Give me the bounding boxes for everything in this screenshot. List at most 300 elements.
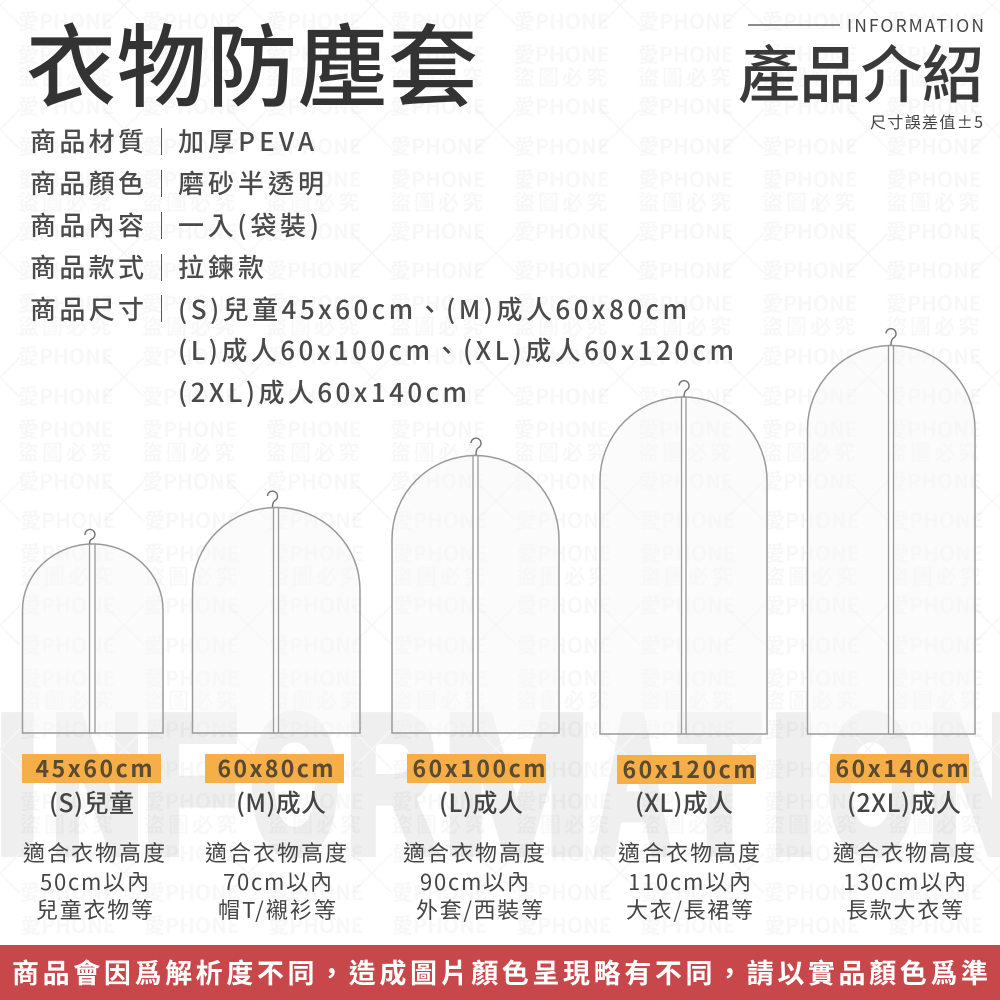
watermark text grid: 盜圖必究 [638, 187, 734, 217]
spec row: contents: 一入(袋裝) [178, 206, 319, 243]
watermark text grid: 愛PHONE [762, 216, 858, 246]
watermark text grid: 愛PHONE [516, 663, 612, 693]
watermark text grid: 愛PHONE [516, 714, 612, 744]
column: S [22, 750, 165, 925]
watermark text grid: 愛PHONE [516, 754, 612, 784]
watermark text grid: 愛PHONE [762, 131, 858, 161]
watermark text grid: 愛PHONE [268, 538, 364, 568]
watermark text grid: 愛PHONE [18, 91, 114, 121]
column: M [205, 750, 347, 925]
size name: (2XL)成人 [847, 784, 961, 820]
watermark text grid: 盜圖必究 [390, 437, 486, 467]
watermark text grid: 盜圖必究 [640, 685, 736, 715]
watermark text grid: 盜圖必究 [764, 809, 860, 839]
watermark text grid: 愛PHONE [266, 381, 362, 411]
watermark text grid: 盜圖必究 [20, 561, 116, 591]
watermark text grid: 愛PHONE [266, 39, 362, 69]
watermark text grid: 愛PHONE [392, 877, 488, 907]
watermark text grid: 愛PHONE [268, 754, 364, 784]
background lettering: INFORMATION: I [768, 675, 818, 894]
watermark text grid: 盜圖必究 [142, 311, 238, 341]
watermark text grid: 愛PHONE [142, 131, 238, 161]
watermark text grid: 愛PHONE [886, 91, 982, 121]
watermark text grid: 愛PHONE [516, 630, 612, 660]
watermark text grid: 盜圖必究 [638, 62, 734, 92]
watermark text grid: 愛PHONE [640, 754, 736, 784]
note: size tolerance: 尺寸誤差值±5 [870, 109, 983, 133]
suitability text: 110cm以內 [628, 865, 751, 897]
watermark text grid: 愛PHONE [640, 505, 736, 535]
watermark text grid: 愛PHONE [392, 630, 488, 660]
watermark text grid: 愛PHONE [142, 255, 238, 285]
spec row: material [30, 122, 315, 159]
watermark text grid: 盜圖必究 [886, 62, 982, 92]
watermark text grid: 盜圖必究 [390, 62, 486, 92]
watermark text grid: 愛PHONE [268, 838, 364, 868]
suitability text [403, 836, 545, 925]
spec row: colour: 磨砂半透明 [178, 164, 324, 201]
watermark text grid: 盜圖必究 [266, 437, 362, 467]
watermark text grid: 愛PHONE [764, 538, 860, 568]
watermark text grid: 愛PHONE [392, 910, 488, 940]
garment bag: XL [600, 381, 767, 734]
watermark text grid: 愛PHONE [638, 288, 734, 318]
watermark text grid: 愛PHONE [18, 414, 114, 444]
suitability text: 兒童衣物等 [36, 893, 153, 925]
watermark text grid: 愛PHONE [516, 538, 612, 568]
watermark text grid: 愛PHONE [514, 216, 610, 246]
watermark text grid: 愛PHONE [888, 663, 984, 693]
watermark text grid: 盜圖必究 [640, 809, 736, 839]
watermark text grid: 盜圖必究 [764, 561, 860, 591]
watermark text grid: 愛PHONE [144, 663, 240, 693]
watermark text grid: 愛PHONE [764, 786, 860, 816]
watermark text grid: 愛PHONE [638, 164, 734, 194]
size name: (S)兒童 [49, 784, 134, 820]
watermark text grid: 愛PHONE [144, 714, 240, 744]
watermark text grid: 盜圖必究 [762, 311, 858, 341]
suitability text: 適合衣物高度 [403, 836, 545, 868]
watermark text grid: 愛PHONE [514, 414, 610, 444]
watermark text grid: 盜圖必究 [764, 685, 860, 715]
watermark text grid: 愛PHONE [514, 288, 610, 318]
background lettering: INFORMATION: O [827, 675, 916, 894]
size label: 60x120cm: 60x120cm [622, 751, 756, 785]
spec row: sizes: (2XL)成人60x140cm [178, 373, 467, 410]
watermark text grid: 愛PHONE [514, 91, 610, 121]
watermark text grid: 愛PHONE [20, 505, 116, 535]
watermark text grid: 愛PHONE [20, 838, 116, 868]
watermark text grid: 愛PHONE [888, 714, 984, 744]
watermark text grid: 盜圖必究 [392, 685, 488, 715]
watermark text grid: 愛PHONE [268, 590, 364, 620]
watermark text grid: 愛PHONE [514, 466, 610, 496]
watermark text grid: 愛PHONE [886, 131, 982, 161]
watermark text grid: 愛PHONE [390, 414, 486, 444]
spec row: sizes [30, 290, 734, 410]
size label: 60x80cm: 60x80cm [218, 750, 334, 784]
watermark text grid: 盜圖必究 [18, 311, 114, 341]
size label: 60x100cm: 60x100cm [412, 750, 546, 784]
watermark text grid: 愛PHONE [638, 466, 734, 496]
watermark text grid: 盜圖必究 [516, 685, 612, 715]
watermark text grid: 愛PHONE [514, 164, 610, 194]
watermark text grid: 愛PHONE [640, 663, 736, 693]
watermark text grid: 愛PHONE [266, 341, 362, 371]
watermark text grid: 愛PHONE [142, 414, 238, 444]
watermark text grid: 愛PHONE [886, 6, 982, 36]
watermark text grid: 愛PHONE [268, 663, 364, 693]
watermark text grid: 愛PHONE [640, 630, 736, 660]
watermark text grid: 愛PHONE [514, 6, 610, 36]
spec list [30, 122, 734, 410]
suitability text: 長款大衣等 [846, 893, 963, 925]
watermark text grid: 愛PHONE [764, 630, 860, 660]
watermark text grid: 愛PHONE [390, 341, 486, 371]
watermark text grid: 盜圖必究 [886, 187, 982, 217]
watermark text grid: 愛PHONE [886, 381, 982, 411]
watermark text grid: 愛PHONE [762, 288, 858, 318]
watermark text grid: 愛PHONE [266, 466, 362, 496]
column: XL [617, 751, 760, 925]
watermark text grid: 盜圖必究 [20, 685, 116, 715]
spec row: material: 加厚PEVA [178, 122, 315, 159]
background lettering: INFORMATION: F [141, 675, 239, 894]
watermark text grid: 盜圖必究 [514, 437, 610, 467]
watermark text grid: 愛PHONE [266, 6, 362, 36]
watermark text grid: 愛PHONE [514, 341, 610, 371]
watermark text grid: 愛PHONE [886, 288, 982, 318]
spec row: sizes: (L)成人60x100cm、(XL)成人60x120cm [178, 331, 734, 368]
suitability text [618, 836, 760, 925]
garment bag: S [22, 529, 163, 733]
watermark text grid: 愛PHONE [390, 6, 486, 36]
size name: (XL)成人 [635, 784, 733, 820]
size label: 45x60cm: 45x60cm [36, 750, 152, 784]
watermark text grid: 愛PHONE [144, 630, 240, 660]
watermark text grid: 愛PHONE [142, 39, 238, 69]
watermark text grid: 愛PHONE [638, 381, 734, 411]
watermark text grid: 愛PHONE [144, 786, 240, 816]
header: information label: INFORMATION [847, 13, 984, 38]
watermark text grid: 愛PHONE [18, 381, 114, 411]
watermark text grid: 愛PHONE [392, 663, 488, 693]
watermark text grid: 愛PHONE [268, 910, 364, 940]
watermark text grid: 愛PHONE [886, 216, 982, 246]
watermark text grid: 愛PHONE [266, 91, 362, 121]
watermark text grid: 盜圖必究 [144, 809, 240, 839]
watermark text grid: 愛PHONE [764, 838, 860, 868]
watermark text grid: 愛PHONE [20, 786, 116, 816]
watermark text grid: 愛PHONE [888, 910, 984, 940]
column: 2XL [830, 750, 975, 925]
background lettering: INFORMATION: O [250, 675, 340, 894]
footer disclaimer bar [0, 945, 1000, 1000]
watermark text grid: 愛PHONE [764, 505, 860, 535]
watermark text grid: 愛PHONE [764, 590, 860, 620]
watermark text grid: 盜圖必究 [144, 561, 240, 591]
watermark text grid: 愛PHONE [144, 910, 240, 940]
watermark text grid: 愛PHONE [888, 538, 984, 568]
watermark text grid: 愛PHONE [142, 6, 238, 36]
suitability text [833, 836, 975, 925]
watermark text grid: 盜圖必究 [18, 187, 114, 217]
watermark text grid: 愛PHONE [392, 714, 488, 744]
watermark text grid: 盜圖必究 [638, 311, 734, 341]
footer disclaimer bar: 商品會因爲解析度不同，造成圖片顏色呈現略有不同，請以實品顏色爲準 [12, 952, 988, 991]
watermark text grid: 盜圖必究 [18, 62, 114, 92]
watermark text grid: 愛PHONE [142, 466, 238, 496]
watermark text grid: 盜圖必究 [514, 62, 610, 92]
watermark text grid: 愛PHONE [638, 131, 734, 161]
watermark text grid: 盜圖必究 [392, 809, 488, 839]
watermark text grid: 愛PHONE [640, 590, 736, 620]
watermark text grid: 愛PHONE [888, 877, 984, 907]
watermark text grid: 愛PHONE [142, 216, 238, 246]
suitability text: 70cm以內 [223, 865, 332, 897]
watermark text grid: 愛PHONE [886, 466, 982, 496]
spec row: style: 商品款式 [30, 248, 144, 285]
watermark text grid: 盜圖必究 [640, 561, 736, 591]
watermark text grid: 愛PHONE [638, 255, 734, 285]
watermark text grid: 愛PHONE [886, 341, 982, 371]
watermark text grid: 愛PHONE [266, 255, 362, 285]
watermark text grid: 盜圖必究 [18, 437, 114, 467]
suitability text: 大衣/長裙等 [626, 893, 753, 925]
watermark text grid: 盜圖必究 [888, 685, 984, 715]
size label: 60x140cm: 60x140cm [836, 750, 968, 784]
watermark text grid: 愛PHONE [514, 255, 610, 285]
watermark text grid: 愛PHONE [18, 341, 114, 371]
suitability text [23, 836, 165, 925]
watermark text grid: 愛PHONE [266, 414, 362, 444]
watermark text grid: 愛PHONE [20, 910, 116, 940]
watermark text grid: 愛PHONE [764, 877, 860, 907]
suitability text: 適合衣物高度 [833, 836, 975, 868]
watermark text grid: 愛PHONE [390, 288, 486, 318]
suitability text: 適合衣物高度 [618, 836, 760, 868]
watermark text grid: 愛PHONE [516, 910, 612, 940]
watermark text grid: 盜圖必究 [762, 62, 858, 92]
watermark text grid: 愛PHONE [390, 164, 486, 194]
watermark text grid: 愛PHONE [886, 39, 982, 69]
watermark text grid: 愛PHONE [266, 164, 362, 194]
watermark text grid: 愛PHONE [886, 414, 982, 444]
watermark text grid: 盜圖必究 [142, 187, 238, 217]
watermark text grid: 愛PHONE [764, 910, 860, 940]
watermark text grid: 愛PHONE [764, 714, 860, 744]
watermark text grid: 愛PHONE [392, 838, 488, 868]
watermark text grid: 愛PHONE [762, 466, 858, 496]
watermark text grid: 愛PHONE [390, 216, 486, 246]
watermark text grid: 愛PHONE [392, 754, 488, 784]
watermark text grid: 愛PHONE [640, 838, 736, 868]
watermark text grid: 愛PHONE [18, 6, 114, 36]
watermark text grid: 愛PHONE [268, 630, 364, 660]
watermark text grid: 愛PHONE [762, 255, 858, 285]
background lettering: INFORMATION: M [442, 675, 591, 894]
watermark text grid: 盜圖必究 [516, 809, 612, 839]
watermark text grid: 愛PHONE [142, 381, 238, 411]
watermark text grid: 愛PHONE [514, 39, 610, 69]
watermark text grid: 愛PHONE [142, 91, 238, 121]
watermark text grid: 愛PHONE [268, 714, 364, 744]
watermark text grid: 盜圖必究 [514, 311, 610, 341]
watermark text grid: 愛PHONE [640, 714, 736, 744]
spec row: contents [30, 206, 319, 243]
watermark text grid: 愛PHONE [638, 341, 734, 371]
background lettering: INFORMATION: A [595, 675, 671, 894]
watermark text grid: 愛PHONE [640, 877, 736, 907]
spec row: contents: 商品內容 [30, 206, 144, 243]
background lettering: INFORMATION [0, 675, 1000, 894]
watermark text grid: 愛PHONE [142, 288, 238, 318]
watermark text grid: 愛PHONE [638, 39, 734, 69]
watermark text grid: 愛PHONE [516, 505, 612, 535]
watermark text grid: 盜圖必究 [638, 437, 734, 467]
watermark text grid: 愛PHONE [144, 877, 240, 907]
watermark text grid: 愛PHONE [640, 786, 736, 816]
watermark text grid: 盜圖必究 [266, 187, 362, 217]
watermark text grid: 愛PHONE [144, 505, 240, 535]
watermark text grid: 愛PHONE [266, 216, 362, 246]
column: L [403, 750, 546, 925]
suitability text: 50cm以內 [40, 865, 149, 897]
watermark text grid: 愛PHONE [762, 381, 858, 411]
watermark text grid: 愛PHONE [390, 91, 486, 121]
background lettering: INFORMATION: R [346, 675, 438, 894]
watermark text grid: 盜圖必究 [142, 62, 238, 92]
watermark text grid: 愛PHONE [514, 131, 610, 161]
watermark text grid: 愛PHONE [142, 341, 238, 371]
watermark text grid: 愛PHONE [268, 505, 364, 535]
spec row: style: 拉鍊款 [178, 248, 264, 285]
watermark text grid: 盜圖必究 [268, 561, 364, 591]
watermark text grid: 愛PHONE [762, 341, 858, 371]
size name: (M)成人 [236, 784, 326, 820]
watermark text grid: 盜圖必究 [144, 685, 240, 715]
spec row: sizes: 商品尺寸 [30, 290, 144, 327]
watermark text grid: 愛PHONE [18, 255, 114, 285]
watermark text grid: 盜圖必究 [266, 62, 362, 92]
watermark text grid: 愛PHONE [18, 164, 114, 194]
watermark text grid: 盜圖必究 [888, 561, 984, 591]
watermark text grid: 愛PHONE [144, 838, 240, 868]
watermark text grid: 愛PHONE [638, 414, 734, 444]
watermark text grid: 愛PHONE [764, 663, 860, 693]
watermark text grid: 愛PHONE [390, 255, 486, 285]
watermark text grid: 盜圖必究 [392, 561, 488, 591]
watermark text grid: 愛PHONE [20, 714, 116, 744]
suitability text: 適合衣物高度 [23, 836, 165, 868]
watermark text grid: 愛PHONE [20, 754, 116, 784]
watermark text grid: 盜圖必究 [142, 437, 238, 467]
watermark text grid: 愛PHONE [638, 216, 734, 246]
watermark text grid: 愛PHONE [392, 590, 488, 620]
watermark text grid: 愛PHONE [18, 216, 114, 246]
watermark text grid: 盜圖必究 [268, 685, 364, 715]
watermark text grid: 愛PHONE [142, 164, 238, 194]
spec row: style [30, 248, 264, 285]
spec row: material: 商品材質 [30, 122, 144, 159]
watermark text grid: 盜圖必究 [762, 437, 858, 467]
spec row: colour: 商品顏色 [30, 164, 144, 201]
watermark text grid: 愛PHONE [18, 39, 114, 69]
watermark text grid: 愛PHONE [390, 39, 486, 69]
watermark text grid: 愛PHONE [764, 754, 860, 784]
watermark text grid: 愛PHONE [144, 538, 240, 568]
watermark text grid: 愛PHONE [886, 164, 982, 194]
watermark text grid: 愛PHONE [888, 630, 984, 660]
watermark text grid: 愛PHONE [18, 288, 114, 318]
suitability text [205, 836, 347, 925]
watermark text grid: 盜圖必究 [268, 809, 364, 839]
watermark text grid: 愛PHONE [266, 131, 362, 161]
suitability text: 外套/西裝等 [416, 893, 543, 925]
watermark text grid: 愛PHONE [18, 131, 114, 161]
watermark text grid: 盜圖必究 [516, 561, 612, 591]
watermark text grid: 盜圖必究 [266, 311, 362, 341]
watermark text grid: 愛PHONE [886, 255, 982, 285]
suitability text: 90cm以內 [420, 865, 529, 897]
suitability text: 130cm以內 [843, 865, 966, 897]
watermark text grid: 愛PHONE [392, 505, 488, 535]
watermark text grid: 盜圖必究 [20, 809, 116, 839]
watermark text grid: 愛PHONE [638, 6, 734, 36]
watermark text grid: 愛PHONE [20, 538, 116, 568]
watermark text grid: 愛PHONE [266, 288, 362, 318]
watermark text grid: 愛PHONE [268, 877, 364, 907]
watermark text grid: 愛PHONE [390, 131, 486, 161]
watermark text grid: 愛PHONE [762, 91, 858, 121]
garment bag: M [192, 491, 360, 733]
watermark text grid: 盜圖必究 [886, 437, 982, 467]
watermark text grid: 盜圖必究 [888, 809, 984, 839]
watermark text grid: 愛PHONE [640, 910, 736, 940]
watermark text grid: 盜圖必究 [886, 311, 982, 341]
watermark text grid: 盜圖必究 [514, 187, 610, 217]
suitability text: 適合衣物高度 [205, 836, 347, 868]
watermark text grid: 盜圖必究 [762, 187, 858, 217]
watermark text grid: 愛PHONE [20, 877, 116, 907]
watermark text grid: 愛PHONE [762, 6, 858, 36]
watermark text grid: 愛PHONE [268, 786, 364, 816]
watermark text grid: 盜圖必究 [390, 311, 486, 341]
watermark text grid: 愛PHONE [888, 754, 984, 784]
watermark text grid: 愛PHONE [888, 590, 984, 620]
watermark text grid: 愛PHONE [144, 754, 240, 784]
watermark text grid: 愛PHONE [20, 663, 116, 693]
watermark text grid: 愛PHONE [516, 786, 612, 816]
watermark text grid: 盜圖必究 [390, 187, 486, 217]
size name: (L)成人 [439, 784, 523, 820]
watermark text grid: 愛PHONE [392, 538, 488, 568]
watermark text grid: 愛PHONE [762, 164, 858, 194]
watermark text grid: 愛PHONE [514, 381, 610, 411]
watermark text grid: 愛PHONE [638, 91, 734, 121]
watermark text grid: 愛PHONE [516, 838, 612, 868]
watermark text grid: 愛PHONE [516, 590, 612, 620]
watermark text grid: 愛PHONE [762, 414, 858, 444]
watermark text grid: 愛PHONE [516, 877, 612, 907]
garment bag: L [392, 438, 559, 733]
background lettering: INFORMATION: N [51, 675, 143, 894]
watermark text grid: 愛PHONE [144, 590, 240, 620]
spec row: sizes: (S)兒童45x60cm、(M)成人60x80cm [178, 290, 687, 327]
watermark text grid: 愛PHONE [888, 786, 984, 816]
heading: product introduction: 產品介紹 [738, 25, 984, 115]
watermark text grid: 愛PHONE [392, 786, 488, 816]
